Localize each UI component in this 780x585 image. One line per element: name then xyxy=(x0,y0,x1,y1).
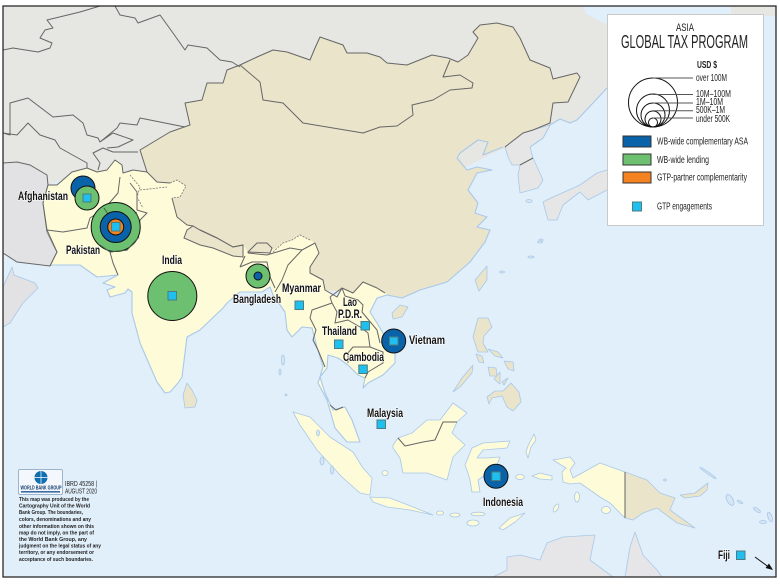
disclaimer: This map was produced by the xyxy=(19,497,89,503)
marker: Thailand xyxy=(334,340,343,348)
country labels xyxy=(18,189,730,562)
country labels: Bangladesh xyxy=(233,292,281,306)
coast line of the mainland xyxy=(50,88,607,442)
country labels: P.D.R. xyxy=(338,307,362,321)
disclaimer: the World Bank Group, any xyxy=(19,537,88,543)
legend: size labels: over 100M xyxy=(696,73,727,84)
land: Sumatra Java and islands xyxy=(293,412,610,530)
legend: GTP-partner complementarity xyxy=(623,172,747,184)
marker: India xyxy=(148,272,197,320)
country labels: Indonesia xyxy=(483,495,523,509)
panel: legend xyxy=(608,14,764,226)
country labels: Thailand xyxy=(322,324,357,338)
marker: Laos xyxy=(361,322,370,330)
legend: size labels: under 500K xyxy=(696,114,730,125)
legend: WB-wide complementary ASA xyxy=(623,136,748,148)
small islands xyxy=(279,200,774,524)
marker: Malaysia xyxy=(377,420,386,428)
legend: size labels: 1M–10M xyxy=(696,97,723,108)
map reference: AUGUST 2020 xyxy=(65,486,97,496)
land: Nepal xyxy=(184,226,243,257)
legend: WB-wide lending xyxy=(623,154,709,166)
land: Hainan and Taiwan xyxy=(392,266,487,319)
land: Japan xyxy=(542,170,607,220)
legend: size labels: 10M–100M xyxy=(696,89,731,100)
land: client countries mainland xyxy=(43,160,395,442)
logo: World Bank Group: WORLD BANK GROUP xyxy=(20,486,62,492)
marker: Indonesia xyxy=(484,464,508,488)
country labels: Lao xyxy=(343,295,357,309)
map reference xyxy=(65,479,97,496)
land: Australia xyxy=(493,532,662,577)
arrow: toward Fiji xyxy=(755,557,773,570)
legend: WB-wide lending: WB-wide lending xyxy=(657,155,709,166)
legend: GTP engagements: GTP engagements xyxy=(657,202,712,212)
land: western New Guinea xyxy=(553,457,625,518)
legend: size labels: 500K–1M xyxy=(696,105,725,116)
marker: Pakistan xyxy=(91,202,140,252)
land: Sri Lanka xyxy=(183,383,197,408)
marker: Fiji xyxy=(736,551,745,560)
disclaimer: Bank Group. The boundaries, xyxy=(19,510,83,516)
legend: proportional circles xyxy=(628,78,693,127)
marker: Afghanistan xyxy=(71,176,99,210)
map reference: IBRD 45258 | xyxy=(65,479,97,488)
disclaimer: judgment on the legal status of any xyxy=(18,544,102,550)
land: Bhutan xyxy=(248,243,272,253)
marker: Myanmar xyxy=(295,301,304,310)
marker: Bangladesh xyxy=(246,264,270,288)
legend: unit heading: USD $ xyxy=(697,60,717,71)
international borders xyxy=(3,6,625,518)
marker: Cambodia xyxy=(359,365,367,374)
land: Korean peninsula xyxy=(505,125,550,193)
country labels: Pakistan xyxy=(66,243,100,257)
disclaimer: acceptance of such boundaries. xyxy=(19,557,93,563)
land: Papua New Guinea xyxy=(625,472,695,528)
country labels: India xyxy=(162,253,182,267)
country labels: Cambodia xyxy=(343,350,384,364)
land: Borneo xyxy=(393,403,467,480)
country labels: Fiji xyxy=(718,548,730,562)
disclaimer: other information shown on this xyxy=(19,524,94,530)
land: Philippines xyxy=(453,318,521,411)
disclaimer xyxy=(18,497,102,563)
disclaimer: Cartography Unit of the World xyxy=(19,504,91,510)
disclaimer: territory, or any endorsement or xyxy=(19,550,95,556)
heading: region: ASIA xyxy=(676,22,694,34)
land: top right corner xyxy=(731,6,776,16)
land: Sulawesi xyxy=(465,441,510,492)
disclaimer: map do not imply, on the part of xyxy=(19,530,94,536)
land: Iran xyxy=(3,162,57,266)
legend: size labels xyxy=(696,73,731,125)
land: New Britain xyxy=(680,483,708,498)
disclaimer: colors, denominations and any xyxy=(19,517,92,523)
country labels: Afghanistan xyxy=(18,189,68,203)
country labels: Myanmar xyxy=(282,281,321,295)
marker: Vietnam xyxy=(382,329,406,353)
legend: GTP engagements xyxy=(632,202,712,212)
land: Russia and Central Asia xyxy=(4,6,607,184)
land: China and Mongolia xyxy=(140,23,580,298)
country labels: Vietnam xyxy=(409,333,445,347)
land: Arabian peninsula xyxy=(3,267,38,327)
logo: World Bank Group xyxy=(18,470,62,494)
country labels: Malaysia xyxy=(367,406,403,420)
